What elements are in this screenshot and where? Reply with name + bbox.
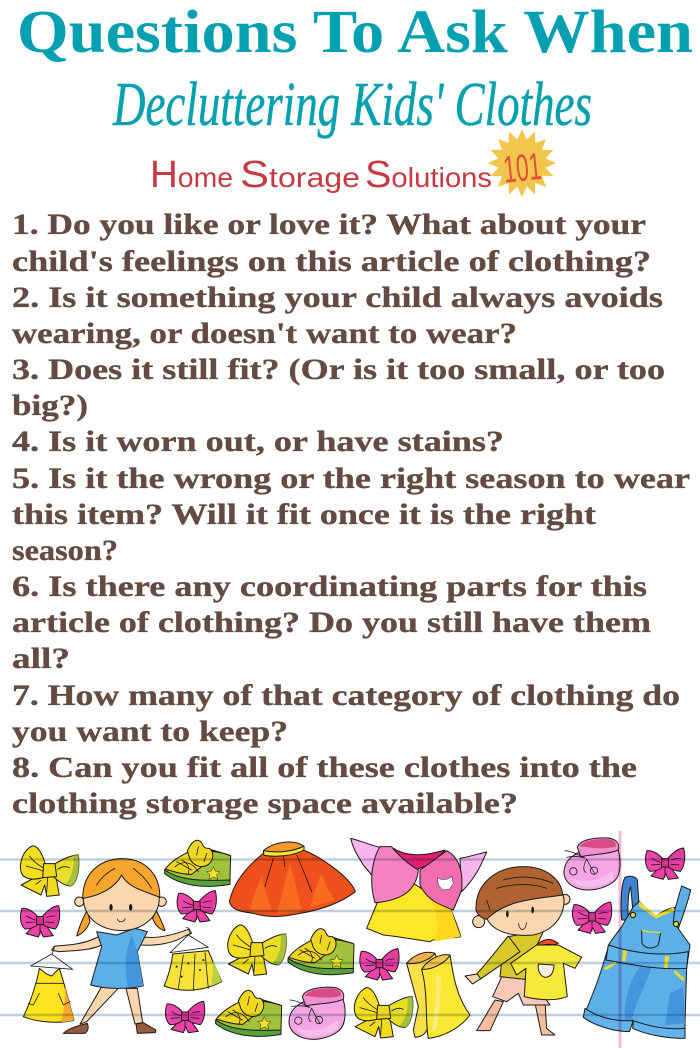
icon: green shoe (165, 840, 231, 886)
pink jacket and yellow dress (351, 838, 487, 942)
icon: green shoe (216, 990, 282, 1036)
logo wordmark: Home (150, 154, 233, 196)
questions text block: 5. Is it the wrong or the right season to wear (12, 462, 690, 495)
title: Questions To Ask When (17, 0, 693, 66)
boy holding yellow t-shirt (465, 867, 582, 1035)
icon: pink bow (360, 949, 399, 980)
logo wordmark: Solutions (365, 154, 492, 196)
questions text block: 7. How many of that category of clothing do (12, 679, 680, 712)
questions text block: 4. Is it worn out, or have stains? (12, 425, 504, 458)
blue overalls (583, 876, 691, 1038)
illustration: kids clothes strip (0, 831, 700, 1048)
notebook ruled lines (0, 860, 700, 1015)
right half of illustration (351, 838, 691, 1038)
logo: sun icon with 101: 101 (501, 146, 543, 192)
icon: pink shoe (564, 838, 620, 890)
questions text block: season? (12, 534, 118, 567)
notebook margin line (618, 831, 622, 1048)
questions text block: clothing storage space available? (12, 787, 518, 820)
icon: green shoe (288, 929, 354, 975)
questions text block: all? (12, 642, 70, 675)
icon: pink bow (572, 902, 612, 933)
icon: pink shoe (289, 987, 345, 1039)
icon: yellow bow (354, 988, 413, 1038)
questions text block: big?) (12, 389, 88, 422)
icon: pink bow (165, 1001, 205, 1033)
icon: pink bow (20, 906, 60, 937)
questions text block: child's feelings on this article of clothing? (12, 245, 651, 278)
red tutu skirt (229, 842, 355, 916)
icon: pink bow (177, 891, 216, 922)
questions text block: 8. Can you fit all of these clothes into the (12, 751, 637, 784)
questions text block: article of clothing? Do you still have them (12, 606, 651, 639)
girl holding hangers (52, 859, 192, 1033)
questions text block: 2. Is it something your child always avoids (12, 281, 663, 314)
left half of illustration (20, 840, 355, 1039)
hanger with yellow dress (23, 947, 74, 1022)
icon: yellow bow (228, 925, 286, 975)
logo wordmark (150, 154, 492, 196)
hanger with yellow skirt (164, 927, 222, 991)
icon: pink bow (645, 848, 685, 879)
logo: sun icon with 101 (488, 129, 556, 197)
questions text block: 1. Do you like or love it? What about your (12, 208, 646, 241)
questions text block: this item? Will it fit once it is the right (12, 498, 596, 531)
questions text block: 3. Does it still fit? (Or is it too small, or too (12, 353, 665, 386)
questions text block: wearing, or doesn't want to wear? (12, 317, 517, 350)
questions text block (12, 208, 690, 820)
yellow rain boots (407, 952, 470, 1038)
logo wordmark: Storage (240, 154, 360, 196)
questions text block: 6. Is there any coordinating parts for this (12, 570, 647, 603)
icon: yellow bow (20, 846, 79, 896)
questions text block: you want to keep? (12, 715, 288, 748)
